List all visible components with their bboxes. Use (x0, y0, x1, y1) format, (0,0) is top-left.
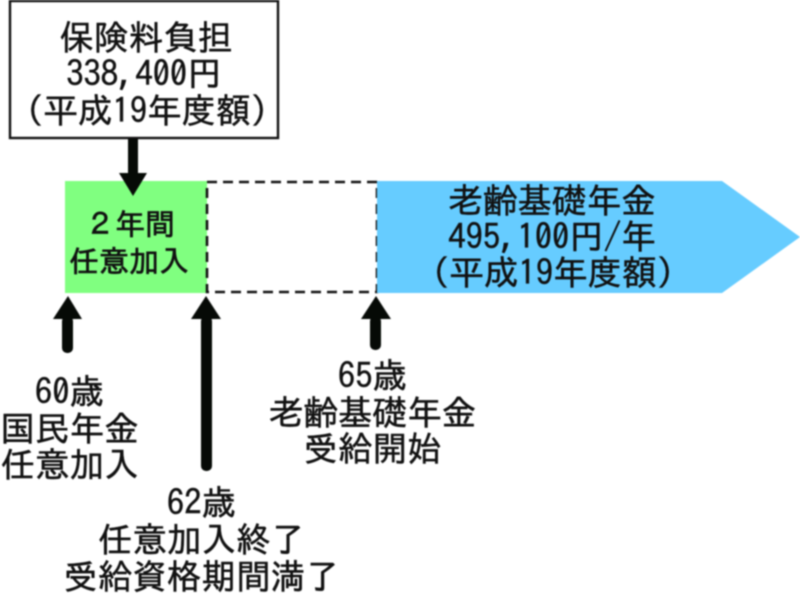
label: age 62 (63, 486, 340, 594)
label: age 62: 62歳 (167, 486, 236, 520)
label: age 60: 60歳 (35, 375, 104, 409)
panel: old-age basic pension arrow: （平成19年度額） (415, 256, 691, 290)
label: age 60: 国民年金 (0, 412, 139, 446)
arrow: age 65 (361, 296, 391, 350)
panel: dashed gap period (207, 182, 377, 292)
arrow: age 60 (53, 296, 82, 353)
label: age 65 (269, 359, 476, 466)
panel: old-age basic pension arrow (377, 181, 800, 293)
panel: two-year voluntary enrollment: ２年間 (85, 209, 175, 239)
label: age 60: 任意加入 (0, 448, 139, 482)
callout: insurance premium burden (9, 1, 285, 138)
label: age 62: 受給資格期間満了 (63, 559, 340, 594)
panel: old-age basic pension arrow: 老齢基礎年金 (448, 184, 656, 218)
callout: insurance premium burden: （平成19年度額） (9, 94, 285, 128)
arrow: age 62 (191, 296, 221, 471)
panel: old-age basic pension arrow: 495,100円/年 (448, 220, 656, 254)
panel: two-year voluntary enrollment (65, 181, 207, 293)
label: age 62: 任意加入終了 (98, 523, 305, 557)
panel: two-year voluntary enrollment: 任意加入 (69, 246, 189, 276)
label: age 65: 老齢基礎年金 (269, 396, 476, 430)
label: age 65: 受給開始 (303, 432, 442, 466)
callout: insurance premium burden: 保険料負担 (60, 20, 232, 55)
callout: insurance premium burden: 338,400円 (66, 57, 222, 91)
label: age 65: 65歳 (338, 359, 407, 393)
arrow: premium to enrollment period (119, 139, 147, 196)
label: age 60 (0, 375, 139, 482)
